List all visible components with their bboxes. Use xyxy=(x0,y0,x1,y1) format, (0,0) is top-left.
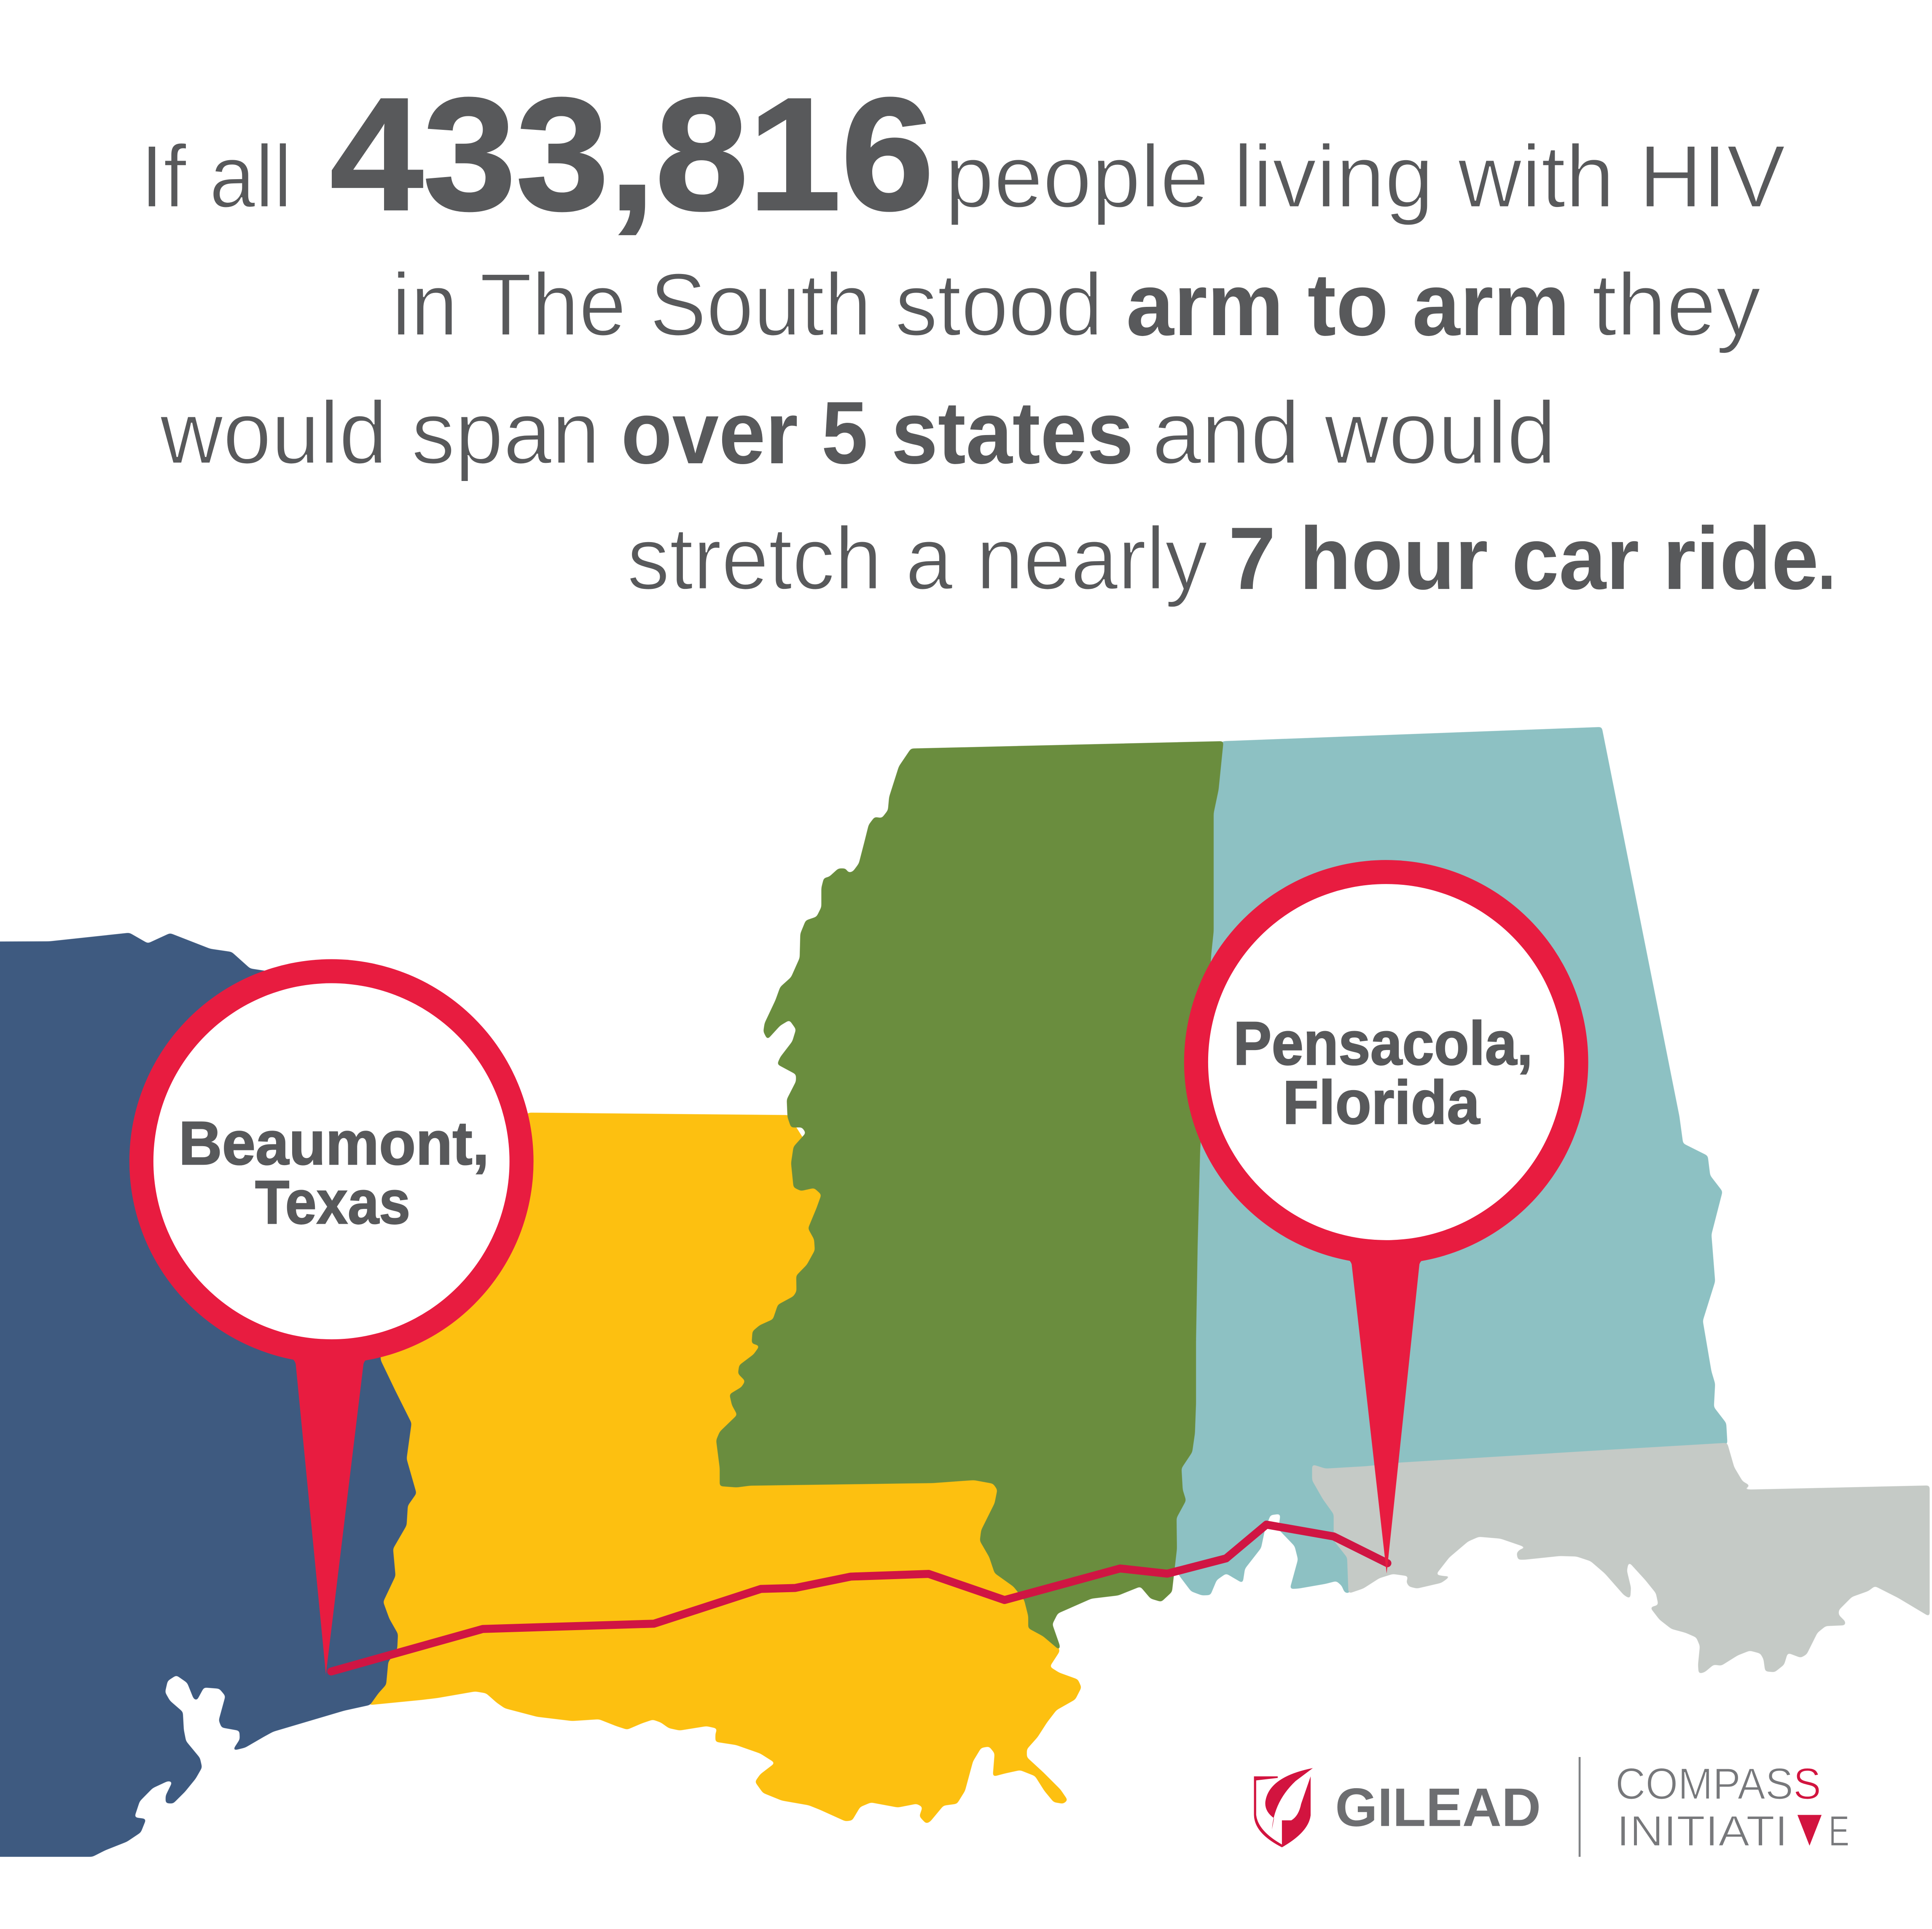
icon: Gilead shield and leaf xyxy=(1254,1768,1313,1847)
map pin: Pensacola, Florida xyxy=(1184,860,1588,1573)
headline: over 5 states xyxy=(621,383,1134,482)
wordmark: INITIATIVE xyxy=(1617,1806,1849,1855)
headline: they xyxy=(1592,255,1761,354)
headline xyxy=(140,64,1836,608)
headline: 7 hour car ride xyxy=(1228,508,1819,608)
headline: stretch a nearly xyxy=(627,508,1207,608)
wordmark: COMPASS: COMPASS xyxy=(1615,1759,1821,1808)
headline: in The South stood xyxy=(392,255,1103,354)
state: Mississippi xyxy=(716,741,1223,1650)
wordmark: INITIATIVE: INITIATI xyxy=(1617,1806,1788,1855)
map pin: Beaumont, Texas xyxy=(129,959,534,1674)
map pin: Beaumont, Texas: Texas xyxy=(255,1168,410,1236)
state: Florida panhandle xyxy=(1312,1443,1929,1674)
map pin: Beaumont, Texas: Beaumont, xyxy=(179,1109,489,1177)
headline: and would xyxy=(1152,383,1556,482)
headline: would span xyxy=(160,383,600,482)
map pin: Pensacola, Florida: Florida xyxy=(1283,1068,1481,1137)
headline: arm to arm xyxy=(1126,255,1570,354)
state: Louisiana and Arkansas region xyxy=(357,1112,1081,1824)
divider xyxy=(1579,1757,1580,1857)
headline: . xyxy=(1817,508,1836,608)
logo: Gilead Compass Initiative xyxy=(1254,1757,1849,1857)
headline: people living with HIV xyxy=(945,126,1785,226)
state: Texas xyxy=(0,933,416,1857)
headline: If all xyxy=(140,126,292,226)
headline: 433,816 xyxy=(330,64,934,244)
wordmark: INITIATIVE: E xyxy=(1828,1806,1849,1855)
map of five southern states xyxy=(0,727,1929,1857)
state: Alabama xyxy=(1164,727,1728,1596)
map pin: Pensacola, Florida: Pensacola, xyxy=(1233,1009,1533,1077)
route line from Beaumont to Pensacola xyxy=(331,1525,1387,1671)
wordmark: GILEAD: GILEAD xyxy=(1335,1778,1541,1838)
